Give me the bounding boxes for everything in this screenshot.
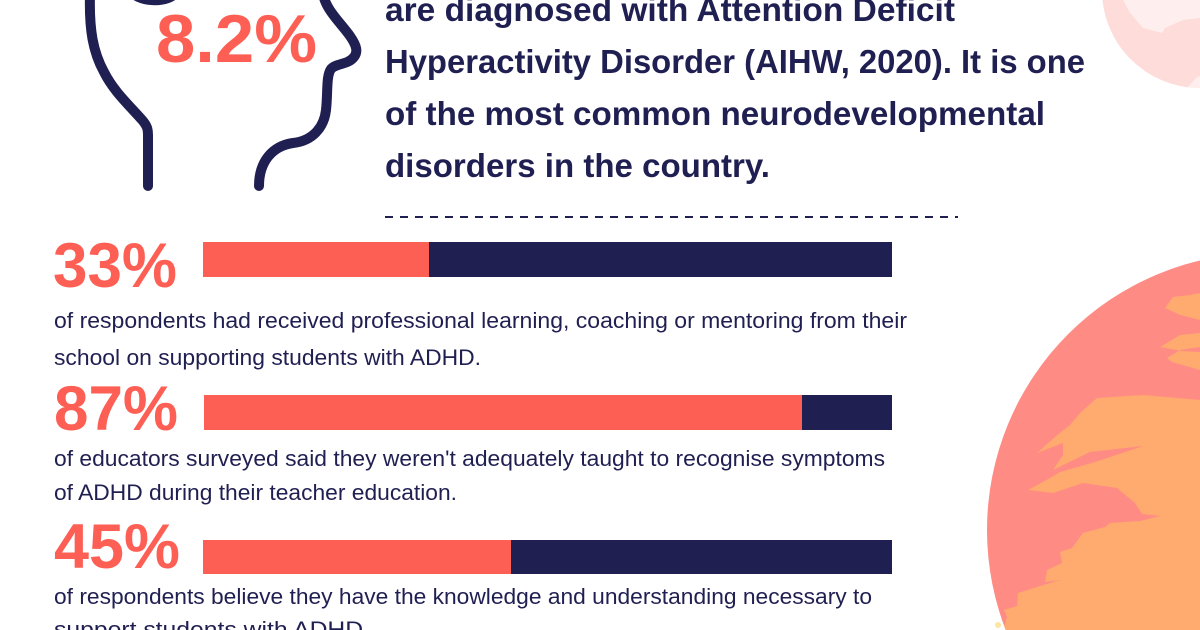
stat row: 33%: school on supporting students with ADHD. <box>54 345 481 370</box>
stat row: 87%: of educators surveyed said they weren't adequately taught to recognise symptoms <box>54 446 885 471</box>
intro paragraph: of the most common neurodevelopmental <box>385 95 1045 132</box>
bar: 33% <box>203 242 892 277</box>
intro paragraph: disorders in the country. <box>385 147 770 184</box>
bar: 45% <box>203 540 892 574</box>
icon: head outline <box>90 0 356 186</box>
stat row: 45%: 45% <box>54 512 180 582</box>
decorative circle: top right <box>1102 0 1200 90</box>
stat row: 45%: of respondents believe they have the knowledge and understanding necessary to <box>54 584 872 609</box>
stat row: 87%: 87% <box>54 374 178 444</box>
decorative circle: lower right <box>987 253 1200 630</box>
stat row: 87% <box>54 374 892 505</box>
bar: 87% <box>204 395 892 430</box>
intro paragraph: Hyperactivity Disorder (AIHW, 2020). It is one <box>385 43 1085 80</box>
stat row: 87%: of ADHD during their teacher education. <box>54 480 457 505</box>
stat row: 33%: 33% <box>53 231 177 301</box>
stat row: 33%: of respondents had received professional learning, coaching or mentoring from their <box>54 308 908 333</box>
stat row: 33% <box>53 231 908 370</box>
stat row: 45% <box>54 512 892 630</box>
stat: 8.2%: 8.2% <box>156 1 317 77</box>
intro paragraph <box>385 0 1085 184</box>
